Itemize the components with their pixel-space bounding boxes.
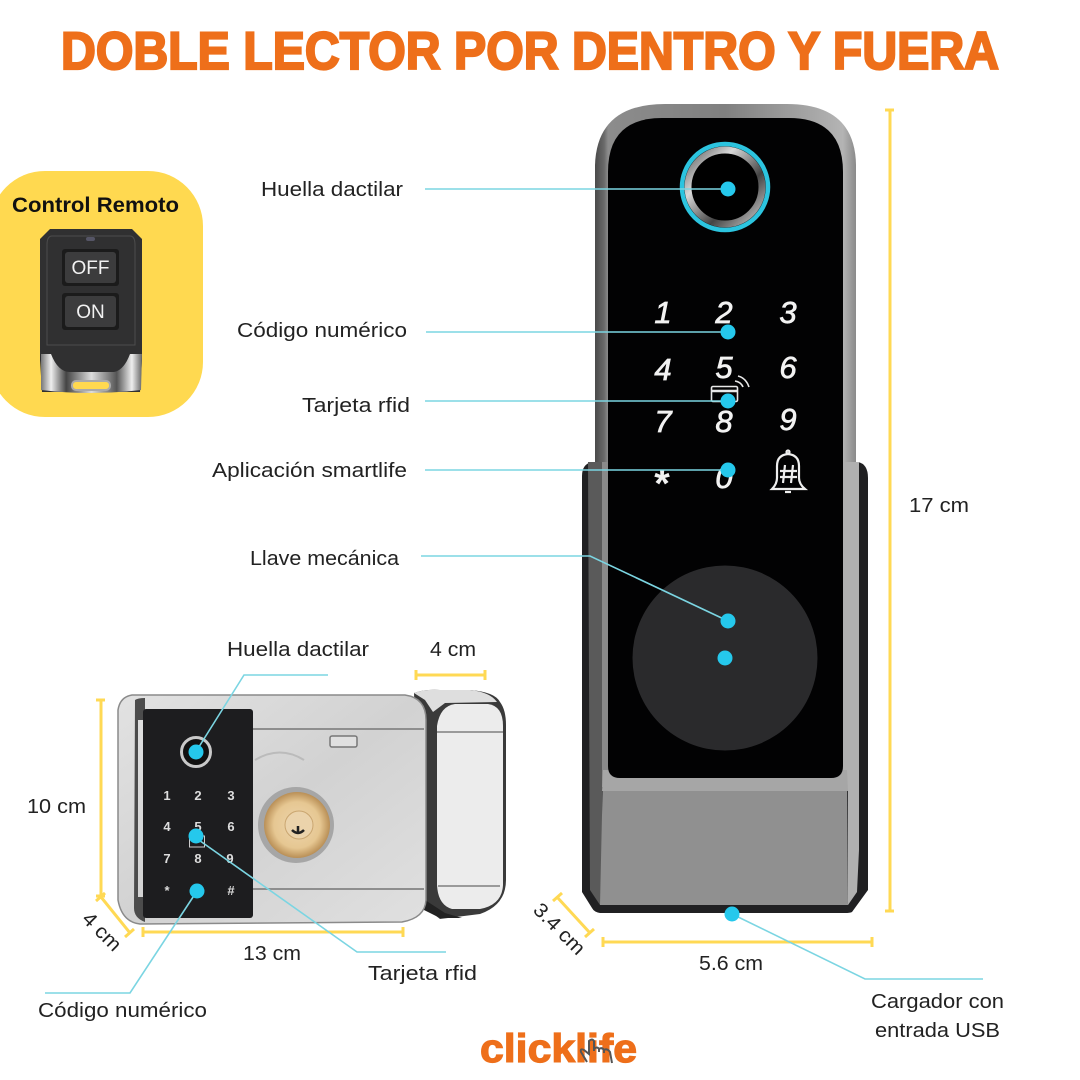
padlock keypad xyxy=(163,788,235,898)
keypad: 0 xyxy=(715,460,733,495)
label: 4 cm top: 4 cm xyxy=(430,639,476,661)
label: cargador con entrada usb: Cargador con xyxy=(871,991,1004,1013)
label: 10 cm: 10 cm xyxy=(27,796,86,818)
leader: tarjeta rfid xyxy=(425,400,728,402)
leader: padlock huella dactilar xyxy=(197,675,328,750)
lock lower frame strips xyxy=(588,462,859,905)
padlock keypad: * xyxy=(164,883,170,898)
padlock fingerprint ring xyxy=(182,738,210,766)
padlock keypad: 2 xyxy=(194,788,202,803)
leader: cargador usb xyxy=(732,914,983,979)
label: padlock tarjeta rfid: Tarjeta rfid xyxy=(368,963,477,985)
title: DOBLE LECTOR POR DENTRO Y FUERA xyxy=(61,22,999,81)
icon: remote control: OFF xyxy=(72,258,110,279)
leader: huella dactilar xyxy=(425,188,728,190)
padlock body xyxy=(118,695,426,924)
label: cargador con entrada usb: entrada USB xyxy=(875,1020,1000,1042)
label: aplicacion smartlife: Aplicación smartlife xyxy=(212,460,407,482)
padlock black panel xyxy=(143,709,253,918)
keypad: 9 xyxy=(779,402,797,437)
lock base xyxy=(600,770,848,905)
padlock keypad: 9 xyxy=(226,851,234,866)
dimension: 17 cm xyxy=(885,110,894,911)
keypad: 3 xyxy=(779,295,797,330)
leader: aplicacion smartlife xyxy=(425,469,728,471)
padlock keypad: 3 xyxy=(227,788,235,803)
keypad: 7 xyxy=(654,404,673,439)
dimension: 10 cm xyxy=(96,700,105,896)
padlock mark xyxy=(330,736,357,747)
label: 4 cm diagonal: 4 cm xyxy=(77,908,126,956)
lock black face xyxy=(608,118,843,778)
panel: control remoto xyxy=(0,171,203,417)
padlock keypad: 1 xyxy=(163,788,171,803)
label: 17 cm: 17 cm xyxy=(909,495,969,517)
lock base highlight xyxy=(602,770,848,791)
icon: doorbell xyxy=(772,450,805,492)
leader: padlock codigo numerico xyxy=(45,891,197,993)
label: padlock codigo numerico: Código numérico xyxy=(38,1000,207,1022)
icon: remote control: ON xyxy=(76,302,105,323)
keypad: * xyxy=(654,462,670,506)
main lock device xyxy=(582,104,868,913)
mechanical key cover xyxy=(632,566,818,750)
keypad: 2 xyxy=(714,295,733,330)
heading: control remoto: Control Remoto xyxy=(12,193,179,217)
dimension: 4 cm top xyxy=(416,670,485,680)
icon: hand cursor xyxy=(581,1040,612,1063)
padlock keypad: 6 xyxy=(227,819,235,834)
label: tarjeta rfid: Tarjeta rfid xyxy=(302,395,410,417)
label: cargador con entrada usb xyxy=(871,991,1004,1042)
dimension: 3.4 cm xyxy=(553,893,594,937)
label: padlock huella dactilar: Huella dactilar xyxy=(227,639,369,661)
label: 5.6 cm: 5.6 cm xyxy=(699,953,763,975)
label: llave mecanica: Llave mecánica xyxy=(250,548,400,570)
keypad: 4 xyxy=(654,352,672,387)
padlock arrow mark xyxy=(255,752,304,760)
label: 13 cm: 13 cm xyxy=(243,943,301,965)
lock front frame xyxy=(595,104,856,462)
padlock keypad: 7 xyxy=(163,851,171,866)
padlock keypad: 8 xyxy=(194,851,202,866)
padlock keypad: # xyxy=(227,883,235,898)
keypad: 6 xyxy=(779,350,797,385)
icon: remote control xyxy=(40,229,142,393)
key cylinder xyxy=(258,787,334,863)
fingerprint sensor xyxy=(682,144,768,230)
label: 3.4 cm: 3.4 cm xyxy=(528,899,589,960)
dimension: 4 cm diagonal xyxy=(96,893,134,937)
keypad: 5 xyxy=(715,350,733,385)
padlock device xyxy=(118,690,506,924)
leader: codigo numerico xyxy=(426,331,728,333)
keypad: 1 xyxy=(654,295,672,330)
dimension: 13 cm xyxy=(143,927,403,937)
padlock keypad: 4 xyxy=(163,819,171,834)
label: codigo numerico: Código numérico xyxy=(237,320,407,342)
padlock side bolt xyxy=(414,690,506,919)
lock housing xyxy=(582,462,868,913)
leader: llave mecanica xyxy=(421,556,728,621)
padlock keypad: 5 xyxy=(194,819,202,834)
logo: clicklife: clicklife xyxy=(480,1027,637,1071)
icon: rfid card xyxy=(712,376,749,402)
dimension: 5.6 cm xyxy=(603,937,872,947)
keypad: 8 xyxy=(715,404,733,439)
leader: padlock tarjeta rfid xyxy=(196,838,446,952)
keypad xyxy=(654,295,805,506)
label: huella dactilar: Huella dactilar xyxy=(261,179,403,201)
marker dots xyxy=(188,182,740,922)
